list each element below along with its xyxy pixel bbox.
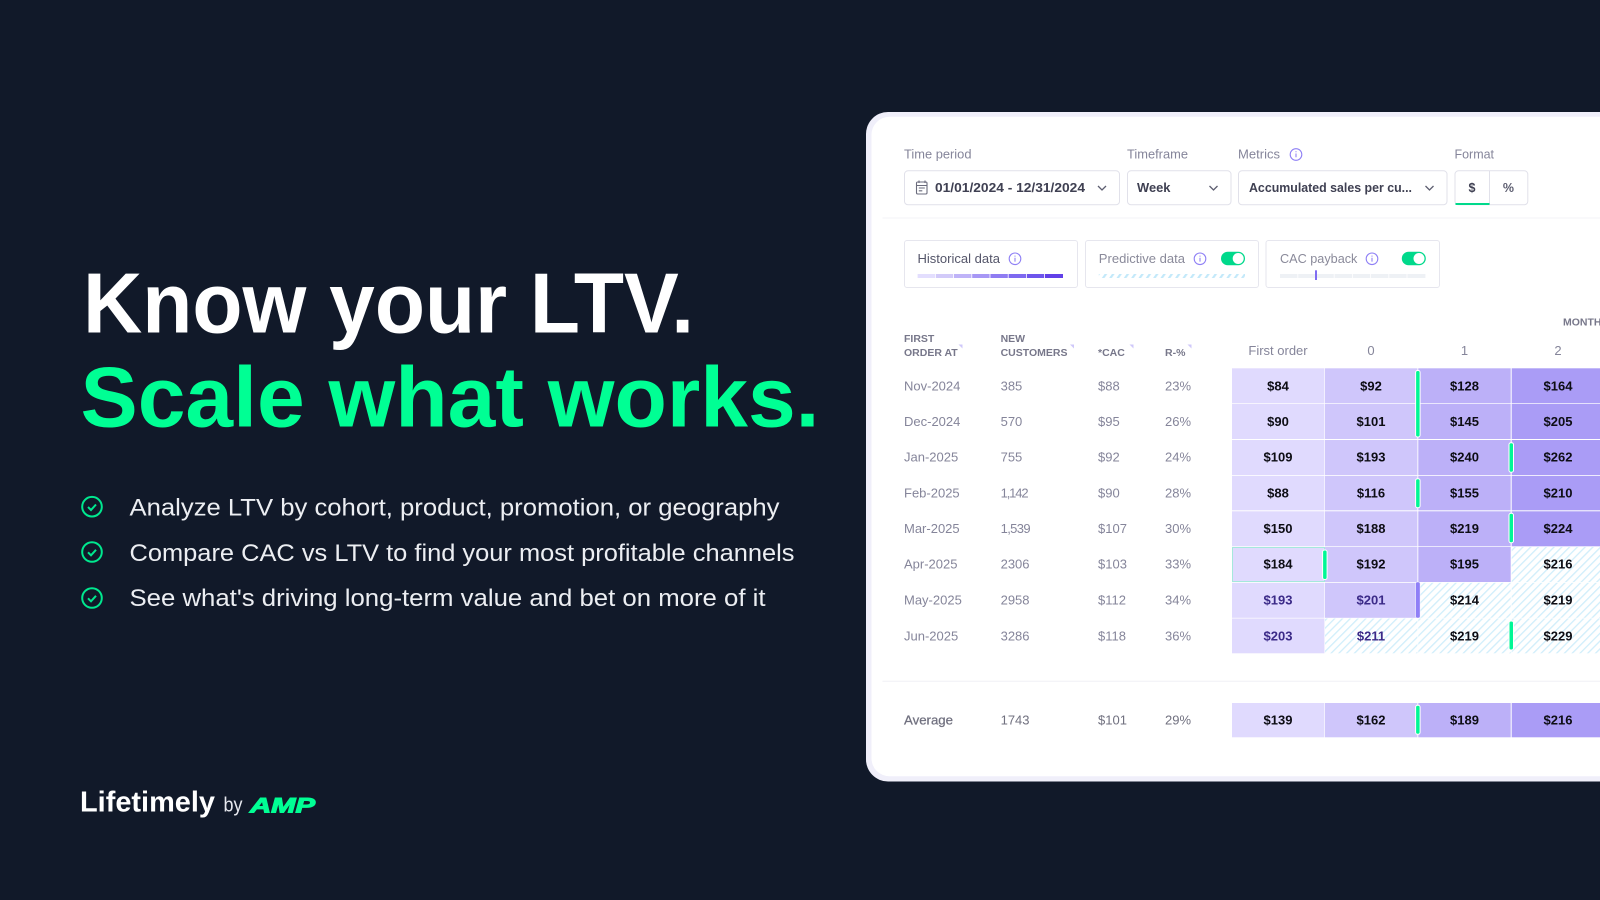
row labels and metrics: 24% bbox=[1165, 450, 1191, 465]
heatmap values: $219 bbox=[1450, 521, 1479, 536]
heatmap cells bbox=[1232, 368, 1600, 653]
heatmap values: $203 bbox=[1264, 629, 1292, 644]
dropdown: timeframe: Week bbox=[1137, 181, 1171, 195]
panel: CAC payback bbox=[1266, 240, 1440, 288]
heatmap values: $101 bbox=[1357, 414, 1385, 429]
icon: info bbox=[1366, 253, 1378, 265]
logo: Lifetimely by AMP bbox=[80, 787, 316, 819]
average row: $189 bbox=[1450, 713, 1479, 728]
heatmap values: $216 bbox=[1544, 557, 1572, 572]
average row bbox=[904, 703, 1600, 737]
bullet 2: Compare CAC vs LTV to find your most profitable channels bbox=[130, 540, 794, 567]
heatmap values: $164 bbox=[1544, 379, 1573, 394]
row labels and metrics: $95 bbox=[1098, 414, 1120, 429]
heatmap values: $90 bbox=[1267, 414, 1289, 429]
heatmap values: $262 bbox=[1544, 450, 1572, 465]
CAC payback markers bbox=[1323, 370, 1514, 650]
heatmap values: $219 bbox=[1450, 629, 1479, 644]
heatmap values: $145 bbox=[1450, 414, 1479, 429]
table header: *CAC bbox=[1098, 347, 1125, 359]
average row: $216 bbox=[1544, 713, 1572, 728]
row labels and metrics: Dec-2024 bbox=[904, 414, 960, 429]
headline line one: Know your LTV. bbox=[83, 257, 694, 352]
heatmap values: $184 bbox=[1264, 557, 1293, 572]
panel: historical data: Historical data bbox=[918, 252, 1000, 266]
icon: info bbox=[1009, 253, 1021, 265]
icon: check circle 2 bbox=[82, 542, 102, 562]
heatmap values: $224 bbox=[1544, 521, 1573, 536]
row labels and metrics: 33% bbox=[1165, 557, 1191, 572]
dropdown: time period: 01/01/2024 - 12/31/2024 bbox=[935, 181, 1085, 195]
segmented control: format: % bbox=[1503, 181, 1514, 195]
heatmap values: $229 bbox=[1544, 629, 1572, 644]
row labels and metrics: 34% bbox=[1165, 593, 1191, 608]
icon: info bbox=[1194, 253, 1206, 265]
dropdown: metrics: Accumulated sales per cu... bbox=[1249, 181, 1412, 195]
icon: calendar bbox=[916, 180, 927, 194]
label: time period: Time period bbox=[904, 148, 972, 162]
row labels and metrics: Jan-2025 bbox=[904, 450, 958, 465]
average row: Average bbox=[904, 713, 953, 728]
row labels and metrics: Apr-2025 bbox=[904, 557, 957, 572]
AMP mark: AMP bbox=[249, 795, 316, 818]
row labels and metrics: 3286 bbox=[1001, 629, 1030, 644]
table header: 0 bbox=[1367, 343, 1375, 358]
heatmap values: $88 bbox=[1267, 485, 1289, 500]
heatmap values: $193 bbox=[1264, 593, 1292, 608]
heatmap values: $193 bbox=[1357, 450, 1385, 465]
row labels and metrics: Feb-2025 bbox=[904, 485, 960, 500]
panel: dashboard card bbox=[866, 112, 1600, 782]
average row: $101 bbox=[1098, 713, 1127, 728]
heatmap values: $201 bbox=[1357, 593, 1385, 608]
row labels and metrics bbox=[904, 379, 1191, 644]
heatmap values: $210 bbox=[1544, 485, 1572, 500]
bullet 1: Analyze LTV by cohort, product, promotion, or geography bbox=[130, 494, 780, 522]
headline line two: Scale what works. bbox=[80, 351, 820, 446]
heatmap values: $219 bbox=[1544, 593, 1572, 608]
heatmap values: $116 bbox=[1357, 485, 1385, 500]
heatmap values: $84 bbox=[1267, 379, 1290, 394]
row labels and metrics: May-2025 bbox=[904, 593, 962, 608]
toggle bbox=[1221, 252, 1245, 265]
table header: R-% bbox=[1165, 347, 1186, 359]
heatmap values: $192 bbox=[1357, 557, 1385, 572]
row labels and metrics: $88 bbox=[1098, 379, 1120, 394]
wordmark: Lifetimely bbox=[80, 787, 215, 819]
heatmap values bbox=[1264, 379, 1573, 644]
legend strip: hatched bbox=[1099, 274, 1245, 278]
row labels and metrics: Mar-2025 bbox=[904, 521, 960, 536]
row labels and metrics: 385 bbox=[1001, 379, 1022, 394]
average row: 1743 bbox=[1001, 713, 1030, 728]
heatmap values: $92 bbox=[1360, 379, 1382, 394]
average row: 29% bbox=[1165, 713, 1191, 728]
dropdown: timeframe bbox=[1128, 171, 1231, 205]
heatmap values: $109 bbox=[1264, 450, 1292, 465]
heatmap values: $211 bbox=[1357, 629, 1385, 644]
row labels and metrics: 1,539 bbox=[1001, 521, 1031, 536]
heatmap values: $195 bbox=[1450, 557, 1479, 572]
legend strip: purple scale bbox=[918, 274, 1063, 278]
legend strip: payback marker bbox=[1280, 270, 1425, 280]
row labels and metrics: 570 bbox=[1001, 414, 1022, 429]
heatmap values: $214 bbox=[1450, 593, 1480, 608]
segmented control: format bbox=[1455, 171, 1528, 205]
panel: CAC payback: CAC payback bbox=[1280, 252, 1358, 266]
heatmap values: $155 bbox=[1450, 485, 1479, 500]
label: format: Format bbox=[1454, 148, 1495, 162]
row labels and metrics: 755 bbox=[1001, 450, 1022, 465]
heatmap values: $240 bbox=[1450, 450, 1479, 465]
headline bbox=[80, 257, 820, 446]
table header: CUSTOMERS bbox=[1001, 347, 1068, 359]
panel: historical data bbox=[904, 240, 1078, 288]
cohort table bbox=[882, 317, 1600, 737]
row labels and metrics: 28% bbox=[1165, 485, 1191, 500]
row labels and metrics: 26% bbox=[1165, 414, 1191, 429]
dropdown: time period bbox=[904, 171, 1120, 205]
row labels and metrics: Nov-2024 bbox=[904, 379, 960, 394]
table header: FIRST bbox=[904, 333, 935, 345]
icon: check circle 3 bbox=[82, 588, 102, 608]
row labels and metrics: $107 bbox=[1098, 521, 1127, 536]
dropdown: metrics bbox=[1238, 171, 1447, 205]
row labels and metrics: 23% bbox=[1165, 379, 1191, 394]
heatmap values: $205 bbox=[1544, 414, 1572, 429]
segmented control: format: $ bbox=[1469, 181, 1476, 195]
benefit list bbox=[82, 494, 794, 612]
table header: 2 bbox=[1554, 343, 1562, 358]
icon: metrics info bbox=[1290, 149, 1302, 160]
table header: First order bbox=[1248, 343, 1308, 358]
row labels and metrics: 2306 bbox=[1001, 557, 1030, 572]
row labels and metrics: $118 bbox=[1098, 629, 1126, 644]
row labels and metrics: $92 bbox=[1098, 450, 1120, 465]
table header: ORDER AT bbox=[904, 347, 958, 359]
label: timeframe: Timeframe bbox=[1127, 148, 1188, 162]
row labels and metrics: 36% bbox=[1165, 629, 1191, 644]
heatmap values: $150 bbox=[1264, 521, 1292, 536]
row labels and metrics: Jun-2025 bbox=[904, 629, 958, 644]
table header: 1 bbox=[1461, 343, 1468, 358]
average row: $139 bbox=[1264, 713, 1292, 728]
heatmap values: $128 bbox=[1450, 379, 1479, 394]
icon: check circle 1 bbox=[82, 497, 102, 516]
row labels and metrics: 1,142 bbox=[1001, 485, 1029, 500]
toggle bbox=[1402, 252, 1426, 265]
table header bbox=[904, 317, 1600, 359]
row labels and metrics: 30% bbox=[1165, 521, 1191, 536]
by: by bbox=[224, 795, 242, 817]
heatmap values: $188 bbox=[1357, 521, 1385, 536]
row labels and metrics: $90 bbox=[1098, 485, 1120, 500]
row labels and metrics: $103 bbox=[1098, 557, 1127, 572]
row labels and metrics: $112 bbox=[1098, 593, 1126, 608]
row labels and metrics: 2958 bbox=[1001, 593, 1030, 608]
panel: predictive data: Predictive data bbox=[1099, 252, 1185, 266]
average row: $162 bbox=[1357, 713, 1385, 728]
table header: NEW bbox=[1001, 333, 1025, 345]
label: metrics: Metrics bbox=[1238, 148, 1280, 162]
filter controls bbox=[904, 148, 1528, 205]
bullet 3: See what's driving long-term value and bet on more of it bbox=[130, 585, 766, 612]
panel: predictive data bbox=[1086, 240, 1258, 288]
